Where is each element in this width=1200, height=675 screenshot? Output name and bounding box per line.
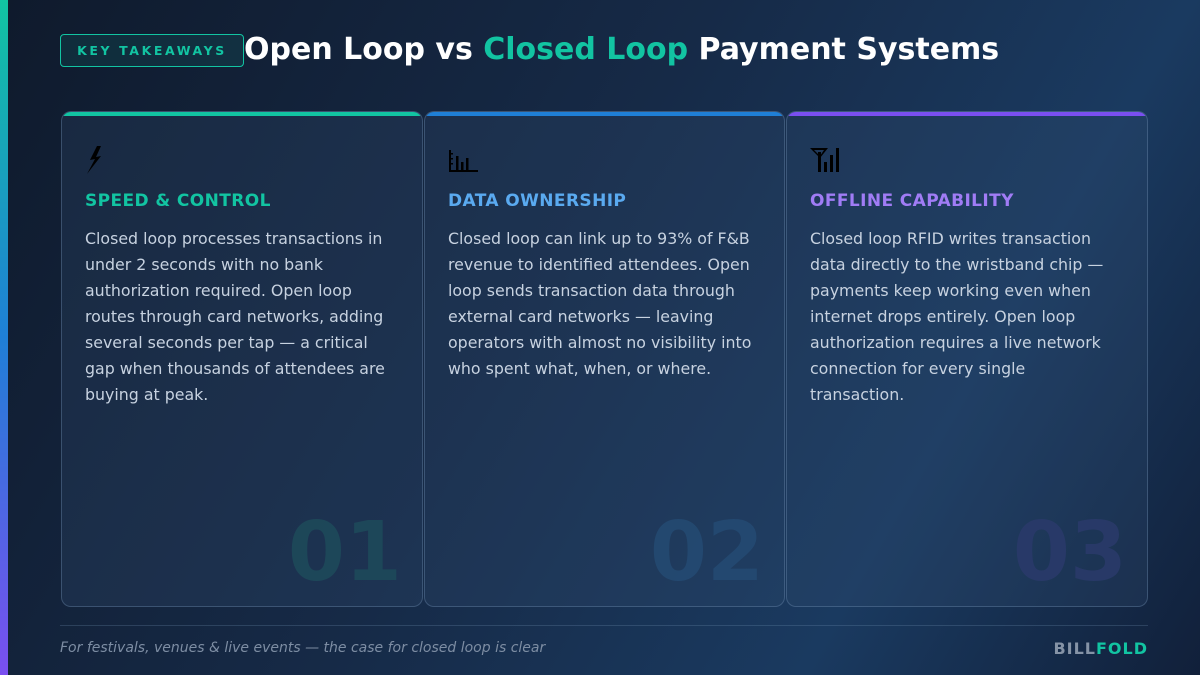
brand logo: BILLFOLD: [1053, 639, 1148, 658]
icon: lightning: [87, 146, 101, 174]
number 02: 02: [650, 505, 764, 600]
heading: speed & control: SPEED & CONTROL: [85, 191, 271, 211]
panel: data ownership: [424, 111, 785, 607]
heading: offline capability: OFFLINE CAPABILITY: [810, 191, 1014, 211]
icon: antenna signal: [810, 148, 839, 172]
panel: speed & control: [61, 111, 423, 607]
text: data: Closed loop can link up to 93% of F&B revenue to identified attendees. Open loop sends transaction data through external card networks — leaving operators with almost no visibility into who spent what, when, or where.: [448, 229, 751, 378]
left accent bar: [0, 0, 8, 675]
badge: key takeaways: [60, 34, 244, 67]
text: speed: Closed loop processes transactions in under 2 seconds with no bank authorization required. Open loop routes through card networks, adding several seconds per tap — a critical gap when thousands of attendees are buying at peak.: [85, 229, 385, 404]
badge: key takeaways: KEY TAKEAWAYS: [77, 43, 227, 58]
number 03: 03: [1013, 505, 1127, 600]
icon: bar chart: [449, 150, 478, 172]
number 01: 01: [288, 505, 402, 600]
title: Open Loop vs Closed Loop Payment Systems: [244, 32, 999, 67]
footer tagline: For festivals, venues & live events — the case for closed loop is clear: [60, 640, 545, 656]
panel: offline capability: [786, 111, 1148, 607]
text: offline: Closed loop RFID writes transaction data directly to the wristband chip — payments keep working even when internet drops entirely. Open loop authorization requires a live network connection for every single transaction.: [810, 229, 1103, 404]
heading: data ownership: DATA OWNERSHIP: [448, 191, 626, 211]
